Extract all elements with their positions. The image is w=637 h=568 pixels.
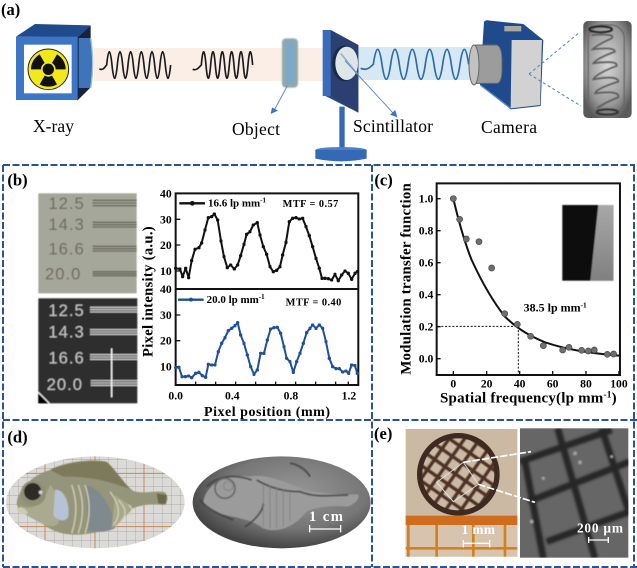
Scintillator label: Scintillator (353, 116, 433, 136)
photo: mesh radiograph (520, 428, 630, 558)
zoom dashes between mesh images (463, 452, 535, 502)
icon: X-ray source box (16, 24, 93, 101)
y tick labels (419, 192, 433, 365)
x tick labels: 0.4 (225, 389, 240, 402)
x tick labels (450, 377, 628, 390)
zoom dashed lines (529, 32, 581, 106)
inset: edge image (562, 205, 613, 281)
line chart: pixel intensity profiles (141, 187, 358, 402)
x tick labels: 0.8 (284, 389, 298, 402)
x tick labels: 40 (514, 377, 526, 390)
chart frame (176, 193, 358, 385)
y tick labels: 20 (160, 239, 172, 252)
legend blue: 20.0 lp mm (207, 294, 259, 306)
inset: spring radiograph (583, 21, 632, 118)
legend black: 16.6 lp mm (208, 198, 260, 210)
photo: test pattern optical: 14.3 (48, 215, 85, 234)
panel e: mesh images (406, 428, 628, 558)
photo: test pattern X-ray: 16.6 (48, 349, 85, 368)
icon: camera (469, 20, 543, 109)
x tick labels: 100 (610, 377, 628, 390)
dashed panel frames (3, 165, 637, 567)
panel c: MTF curve chart (374, 171, 628, 406)
x tick labels: 0.0 (168, 389, 183, 402)
wave: incident X-ray (99, 52, 253, 78)
y tick labels: 30 (160, 213, 172, 226)
panel label e: (e) (374, 424, 392, 443)
x axis title: Spatial frequency(lp mm (440, 390, 603, 406)
x tick labels: 1.2 (342, 389, 356, 402)
x tick labels: 80 (580, 377, 592, 390)
legend black: -1 (260, 197, 266, 205)
y axis title: Pixel intensity (a.u.) (141, 226, 157, 357)
x tick labels: 60 (547, 377, 559, 390)
icon: scintillator on stand (315, 30, 397, 161)
annotation 38.5 lp/mm: 38.5 lp mm (524, 301, 581, 315)
y tick labels: 1.0 (419, 192, 433, 205)
y axis title: Modulation transfer function (399, 183, 415, 375)
y tick labels: 0.2 (419, 320, 433, 333)
blue profile 20.0 lp/mm (176, 323, 357, 378)
photo: test pattern optical: 20.0 (45, 265, 81, 284)
y tick labels (160, 187, 172, 374)
Object label: Object (232, 119, 280, 139)
photo: test pattern optical: 12.5 (48, 194, 85, 213)
panel label b: (b) (7, 171, 28, 190)
photo: mesh radiograph: 200 µm (577, 520, 623, 535)
y tick labels: 10 (160, 361, 172, 374)
legend blue: MTF = 0.40 (286, 297, 341, 308)
Camera label: Camera (481, 117, 537, 137)
black profile 16.6 lp/mm (176, 214, 357, 281)
x tick labels: 20 (481, 377, 493, 390)
x tick labels: 0 (450, 377, 456, 390)
object specimen with arrow (271, 38, 298, 114)
panel label a: (a) (1, 0, 20, 19)
photo: test pattern X-ray (38, 298, 137, 403)
photo: fish radiograph (193, 456, 371, 548)
fitted curve (453, 199, 619, 356)
annotation 38.5 lp/mm: -1 (581, 301, 587, 310)
x axis title: ) (612, 390, 617, 406)
photo: fish on grid paper (6, 455, 185, 548)
panel d: fish photographs (6, 427, 371, 548)
legend blue: -1 (259, 293, 265, 301)
panel a: imaging setup schematic (1, 0, 632, 161)
photo: mesh on grid paper: 1 mm (462, 522, 495, 537)
y tick labels: 40 (160, 187, 172, 200)
panel b: resolution test chart (7, 171, 358, 403)
y tick labels: 30 (160, 309, 172, 322)
data points (450, 196, 617, 357)
y tick labels: 10 (160, 265, 172, 278)
photo: test pattern X-ray: 20.0 (47, 375, 83, 394)
wave: visible light (361, 49, 469, 79)
photo: mesh on grid paper (406, 429, 518, 557)
y tick labels: 0.8 (419, 224, 433, 237)
panel label c: (c) (374, 171, 393, 190)
x axis title b: Pixel position (mm) (204, 405, 330, 420)
photo: test pattern X-ray: 12.5 (48, 301, 85, 320)
blue scintillation beam (358, 47, 470, 80)
legend black: MTF = 0.57 (283, 199, 338, 210)
scale bar 1 cm: 1 cm (309, 509, 343, 525)
y tick labels: 0.4 (419, 288, 433, 301)
x axis title: -1 (603, 391, 612, 401)
y tick labels: 0.6 (419, 256, 433, 269)
legend blue (178, 293, 341, 308)
y tick labels: 40 (160, 283, 172, 296)
X-ray label: X-ray (33, 116, 74, 136)
y tick labels: 20 (160, 335, 172, 348)
panel label d: (d) (7, 427, 28, 446)
x tick labels (168, 389, 356, 402)
y tick labels: 0.0 (419, 352, 433, 365)
photo: test pattern optical: 16.6 (48, 239, 85, 258)
photo: test pattern optical (38, 193, 137, 293)
X-ray beam band (94, 48, 324, 81)
dashed guide lines (438, 326, 518, 373)
photo: test pattern X-ray: 14.3 (48, 323, 85, 342)
chart frame (437, 183, 620, 375)
legend black (179, 197, 338, 210)
scale bar 1 cm (309, 509, 343, 532)
